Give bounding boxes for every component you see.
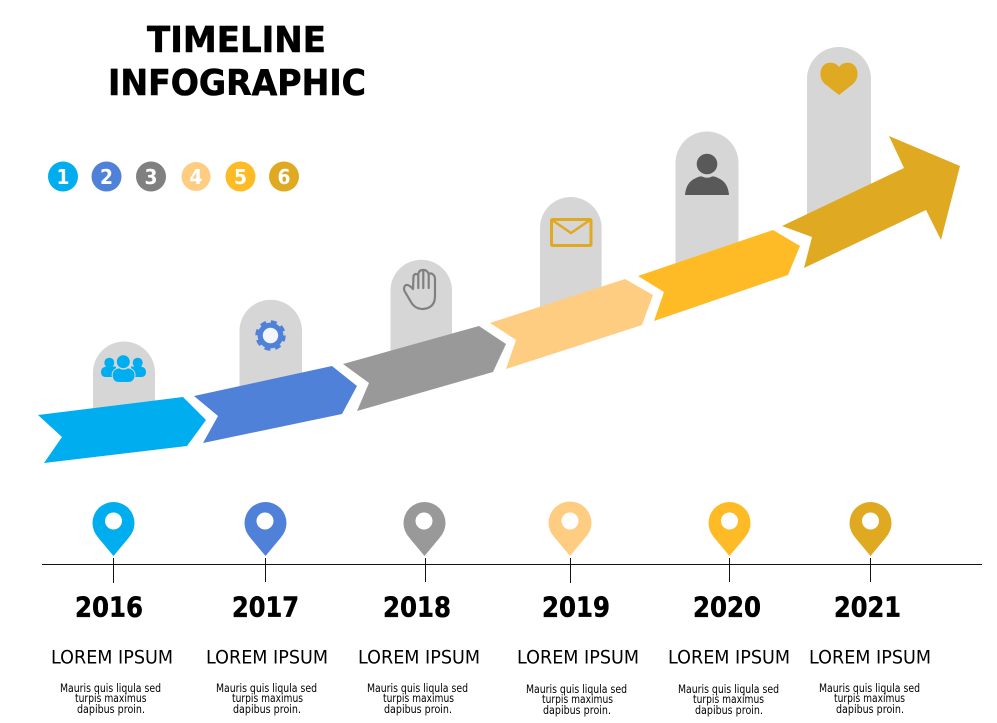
column 2021 text: LOREM IPSUM (809, 648, 931, 668)
timeline axis (42, 558, 982, 583)
column 2021 text: 2021 (834, 592, 901, 624)
column 2019 text: Mauris quis liqula sed (526, 682, 627, 696)
column 2020 text: turpis maximus (693, 692, 764, 706)
arrow segment 2019 (490, 279, 653, 369)
column 2019 text: turpis maximus (542, 692, 613, 706)
column 2020 text: 2020 (693, 592, 761, 624)
column 2016 text: dapibus proin. (77, 702, 145, 716)
tab 2016 with people icon (93, 342, 155, 425)
title (108, 20, 366, 104)
column 2019 text: LOREM IPSUM (517, 648, 639, 668)
column 2020 text: dapibus proin. (695, 703, 763, 717)
arrow segment 2017 (194, 366, 357, 443)
column 2019 text: dapibus proin. (543, 703, 611, 717)
column 2021 text: Mauris quis liqula sed (819, 681, 920, 695)
numbered legend: 5 (234, 165, 247, 189)
title: TIMELINE (147, 20, 326, 61)
column 2020 text (668, 592, 790, 717)
column 2018 text (358, 592, 480, 716)
column 2021 text (809, 592, 931, 716)
column 2020 text: Mauris quis liqula sed (678, 682, 779, 696)
column 2018 text: turpis maximus (383, 691, 454, 705)
column 2018 text: dapibus proin. (384, 702, 452, 716)
numbered legend: 2 (100, 165, 113, 189)
column 2018 text: 2018 (383, 592, 451, 624)
tab 2019 with envelope icon (540, 197, 602, 320)
numbered legend: 1 (56, 165, 70, 189)
column 2021 text: turpis maximus (834, 691, 905, 705)
column 2021 text: dapibus proin. (836, 702, 904, 716)
arrow segment 2016 (38, 397, 206, 463)
column 2017 text: Mauris quis liqula sed (216, 681, 317, 695)
arrow head segment 2021 (782, 136, 960, 268)
numbered legend (48, 162, 299, 192)
column 2019 text: 2019 (542, 592, 610, 624)
column 2016 text: 2016 (75, 592, 143, 624)
numbered legend: 3 (144, 165, 158, 189)
pin 2020 (708, 502, 750, 556)
column 2017 text: dapibus proin. (233, 702, 301, 716)
pin 2019 (548, 501, 592, 556)
column 2019 text (517, 592, 639, 717)
column 2017 text: LOREM IPSUM (206, 648, 328, 668)
tab 2017 with gear icon (240, 300, 302, 400)
column 2018 text: Mauris quis liqula sed (367, 681, 468, 695)
arrow segment 2020 (638, 230, 800, 321)
pin 2017 (244, 502, 286, 556)
column 2016 text: LOREM IPSUM (51, 648, 173, 668)
tab 2020 with person icon (676, 132, 738, 275)
pin 2016 (92, 502, 134, 556)
column 2016 text: turpis maximus (75, 691, 147, 705)
pin 2018 (404, 502, 446, 556)
column 2017 text: turpis maximus (232, 691, 303, 705)
numbered legend: 4 (190, 165, 202, 189)
tab 2018 with hand icon (390, 260, 452, 370)
title: INFOGRAPHIC (108, 63, 366, 104)
pin 2021 (850, 502, 892, 556)
arrow segment 2018 (343, 326, 506, 411)
column 2020 text: LOREM IPSUM (668, 648, 790, 668)
numbered legend: 6 (278, 165, 290, 189)
column 2017 text (206, 592, 328, 716)
tab 2021 with heart icon (807, 47, 871, 225)
column 2017 text: 2017 (232, 592, 299, 624)
column 2016 text (51, 592, 173, 716)
column 2018 text: LOREM IPSUM (358, 648, 480, 668)
column 2016 text: Mauris quis liqula sed (60, 681, 161, 695)
